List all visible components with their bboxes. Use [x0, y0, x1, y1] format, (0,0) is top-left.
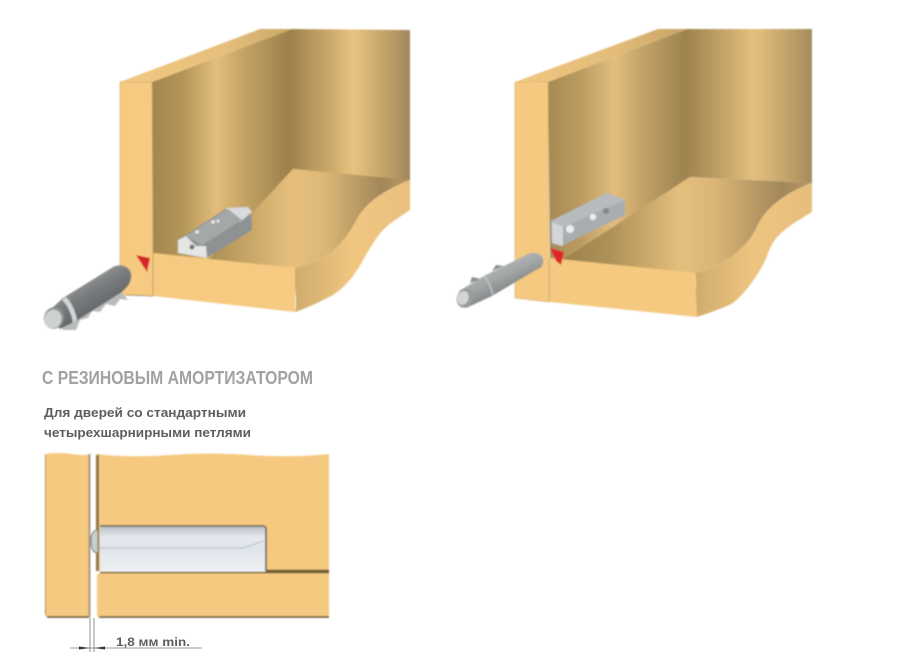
back wall	[548, 29, 812, 260]
description text: четырехшарнирными петлями	[44, 426, 251, 440]
cabinet floor	[208, 169, 410, 268]
illustration: cabinet with dark bumper	[41, 29, 410, 332]
heading: С РЕЗИНОВЫМ АМОРТИЗАТОРОМ	[42, 368, 313, 388]
bumper rod	[91, 526, 266, 571]
front vertical panel	[515, 82, 549, 302]
shelf panel	[97, 573, 329, 617]
description text: Для дверей со стандартными	[44, 406, 246, 420]
seam line	[548, 258, 550, 302]
front edge	[550, 258, 697, 317]
description text	[44, 406, 251, 440]
shadow under panel	[126, 295, 153, 296]
red marker	[136, 255, 150, 272]
top edge	[515, 29, 687, 82]
cabinet floor	[562, 177, 812, 273]
section diagram: door and cabinet cross-section	[45, 453, 329, 617]
curved side edge	[695, 183, 812, 317]
illustration: cabinet with light bumper	[454, 29, 812, 317]
dark joint line	[266, 570, 329, 573]
front edge	[153, 253, 295, 312]
cabinet side panel	[96, 454, 329, 571]
seam line	[152, 253, 154, 296]
light bumper	[454, 253, 543, 310]
dark bumper	[41, 265, 131, 332]
door edge	[44, 455, 46, 615]
dimension: gap	[70, 618, 202, 652]
top edge	[120, 29, 292, 82]
back wall	[152, 29, 410, 260]
mounting bracket	[551, 193, 625, 246]
front vertical panel	[120, 82, 153, 296]
red marker	[550, 248, 564, 265]
curved side edge	[295, 180, 410, 312]
door panel	[45, 453, 89, 617]
dimension: gap: 1,8 мм min.	[116, 635, 190, 649]
mounting bracket	[178, 207, 252, 258]
cabinet side edge	[96, 455, 99, 571]
